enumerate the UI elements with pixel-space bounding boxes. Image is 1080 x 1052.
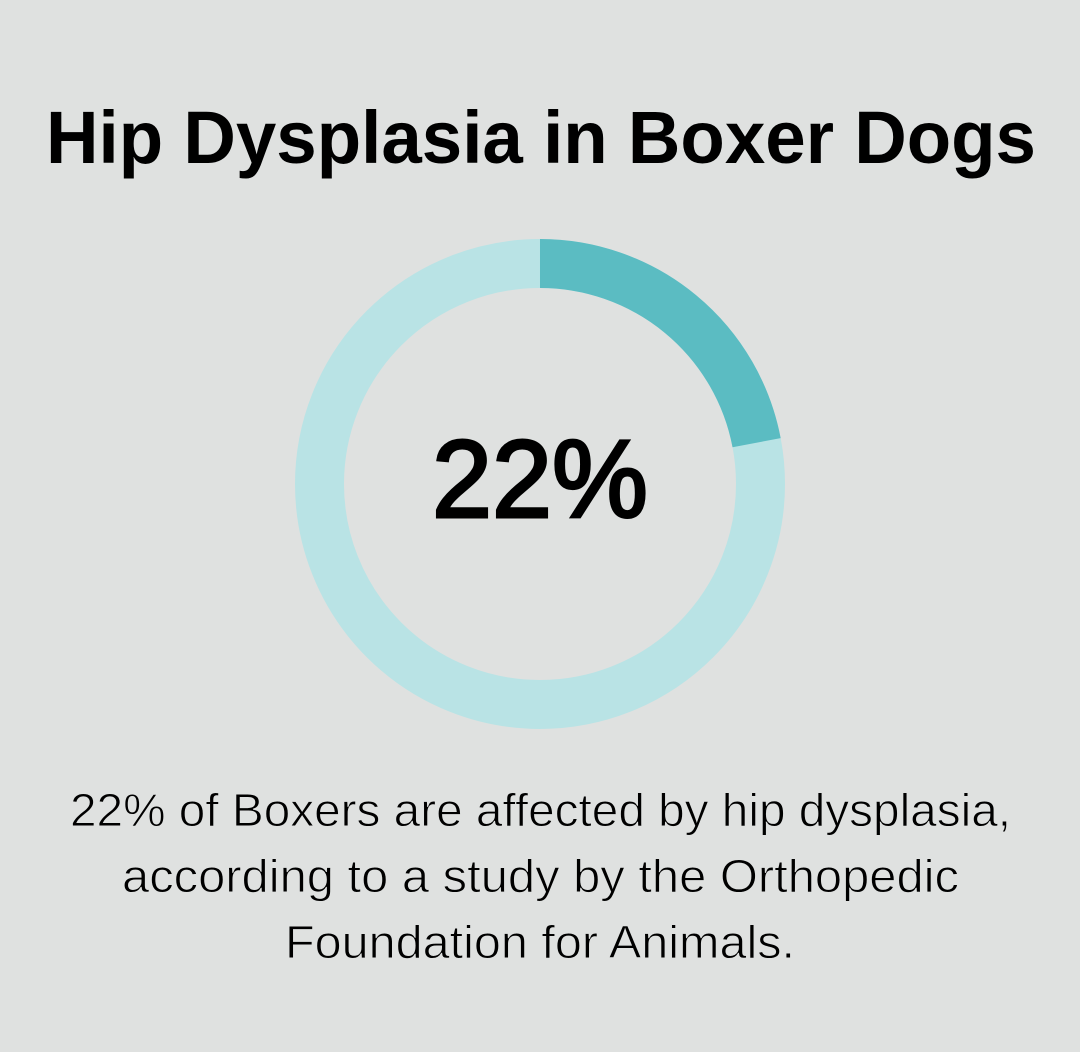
- description text: Foundation for Animals.: [285, 916, 795, 968]
- description text: according to a study by the Orthopedic: [122, 850, 959, 902]
- title: Hip Dysplasia in Boxer Dogs: [46, 96, 1036, 179]
- center value: 22%: [432, 418, 648, 541]
- donut track: [320, 264, 760, 704]
- donut chart: 22 percent: [320, 264, 760, 704]
- donut segment: 22 percent: [540, 264, 757, 443]
- description text: 22% of Boxers are affected by hip dysplasia,: [70, 784, 1011, 836]
- description text: [70, 784, 1011, 968]
